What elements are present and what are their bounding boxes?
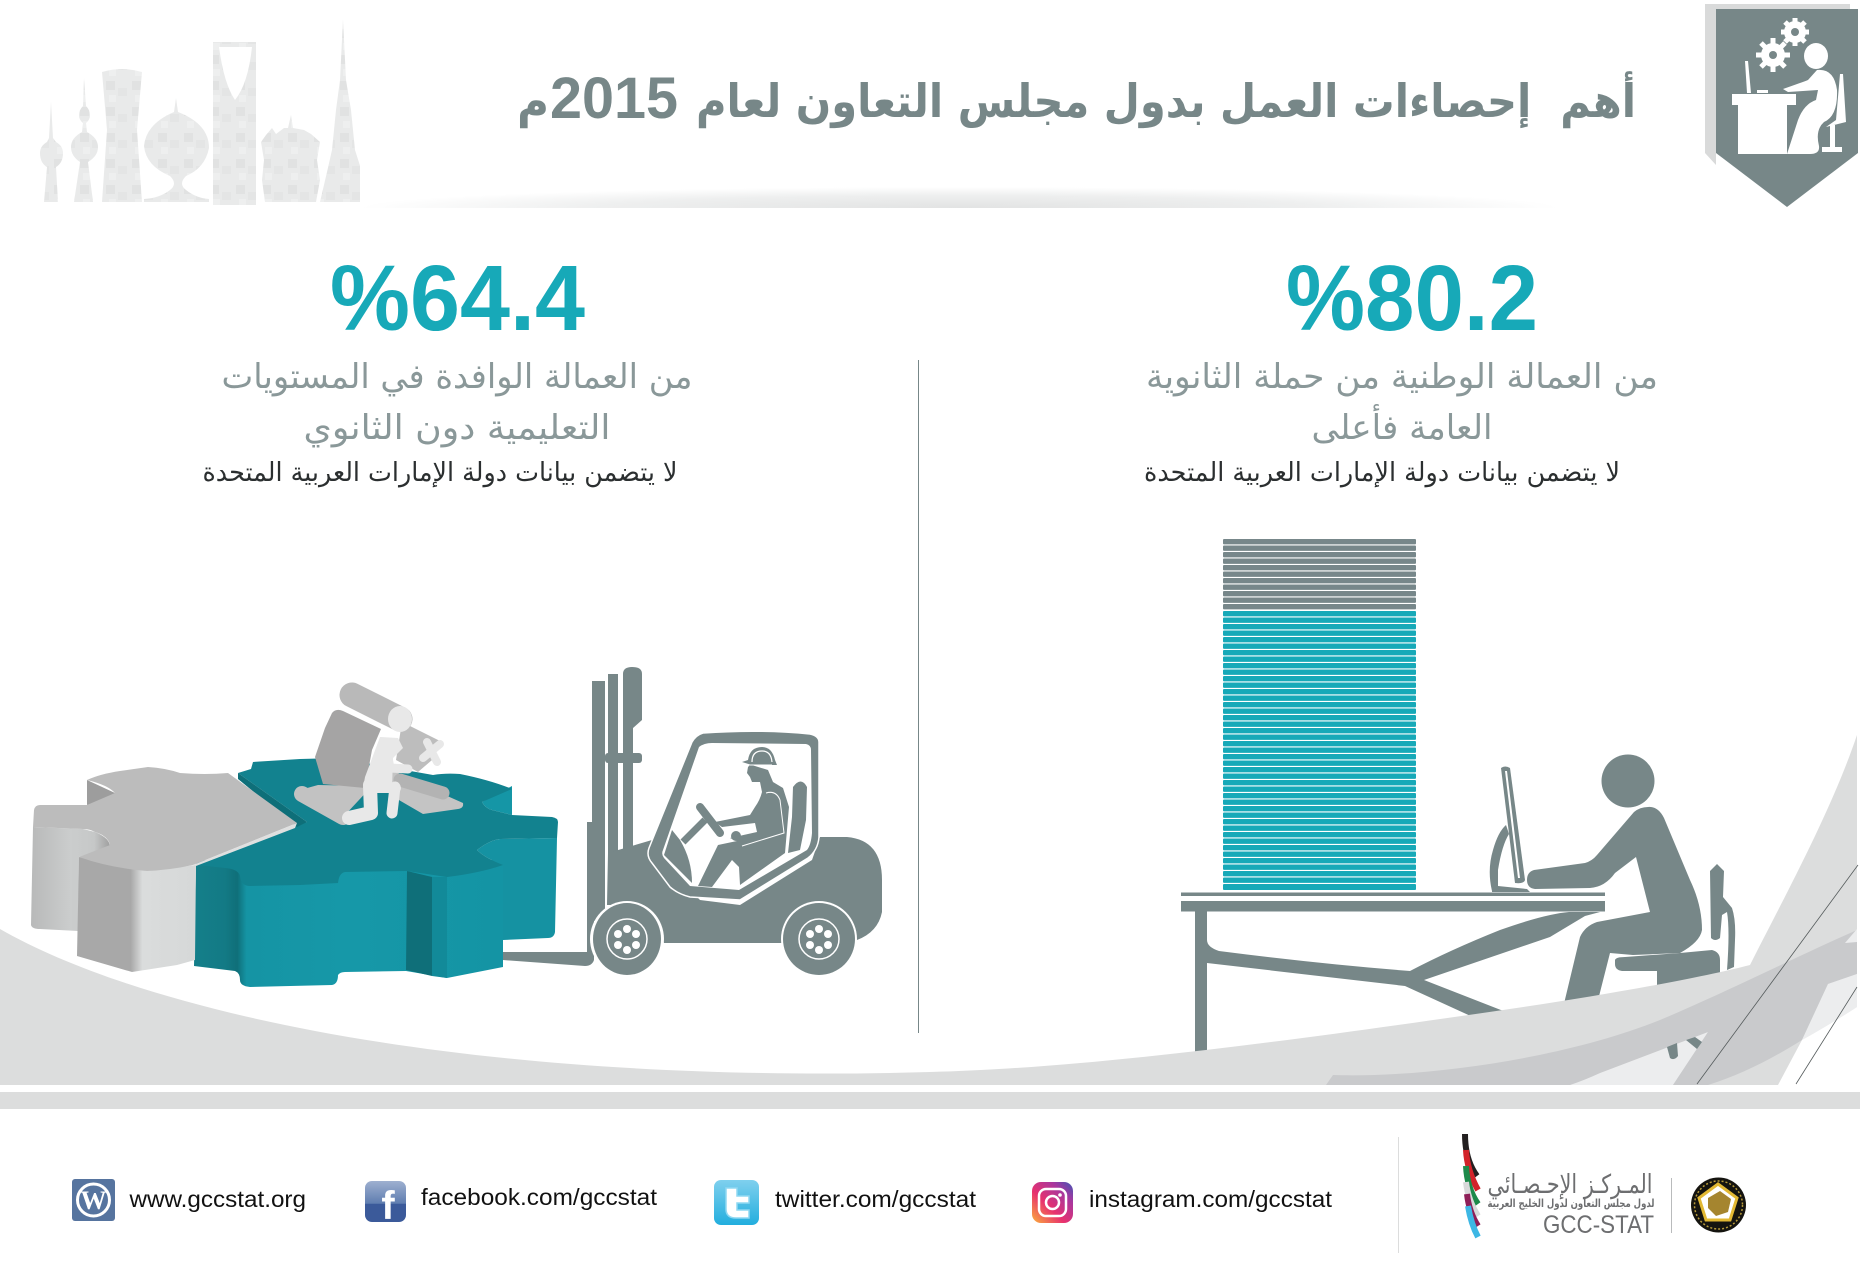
description lines: [222, 357, 692, 448]
panel: expatriate workforce statistic: [202, 246, 692, 488]
seat: [788, 782, 807, 853]
footer: instagram link: instagram.com/gccstat: [1089, 1186, 1333, 1212]
grey layers: 11: [1223, 539, 1416, 609]
forklift with driver: [503, 667, 882, 977]
pedals and steering: [664, 807, 720, 883]
footer: wordpress link: www.gccstat.org: [128, 1186, 306, 1212]
logo text: GCC-STAT: [1543, 1211, 1654, 1239]
footer divider: [1398, 1137, 1399, 1253]
rear wheel: [781, 901, 857, 977]
icon: instagram: [1032, 1182, 1073, 1223]
ribbon: [1465, 1134, 1478, 1237]
teal layers: 43: [1223, 611, 1416, 890]
footer: wordpress link: [72, 1179, 306, 1221]
description lines: من العمالة الوافدة في المستويات: [222, 357, 692, 397]
footer: twitter link: [714, 1180, 977, 1225]
GCC-STAT logo: [1465, 1134, 1746, 1239]
icon: pennant with worker and gears: [1705, 4, 1858, 207]
header shadow band: [360, 166, 1560, 208]
logo text: [1488, 1170, 1654, 1239]
note: لا يتضمن بيانات دولة الإمارات العربية المتحدة: [202, 458, 678, 488]
stat: 64.4 percent: %64.4: [330, 246, 585, 350]
gear illustration: grey cog: [31, 767, 297, 972]
footer: facebook link: [365, 1181, 658, 1228]
footer: twitter link: twitter.com/gccstat: [775, 1186, 977, 1212]
monitor: [1490, 766, 1530, 892]
description lines: التعليمية دون الثانوي: [304, 408, 610, 448]
logo text: لدول مجلس التعاون لدول الخليج العربية: [1488, 1197, 1654, 1210]
body: [607, 837, 882, 943]
cab frame: [648, 731, 819, 900]
title: [517, 66, 1636, 131]
driver: [698, 747, 789, 887]
footer: facebook link: facebook.com/gccstat: [421, 1184, 658, 1210]
divider: [918, 360, 919, 1033]
front wheel: [590, 901, 664, 977]
person working at desk: [1181, 754, 1735, 1060]
worker carrying pipes and rails: [300, 695, 463, 818]
cab window: [662, 743, 812, 890]
title: أهم إحصاءات العمل بدول مجلس التعاون لعام: [696, 71, 1636, 129]
GCC emblem: [1691, 1178, 1746, 1232]
body: [1527, 807, 1702, 1012]
chair feet: [1667, 1037, 1702, 1059]
title: م: [517, 74, 549, 128]
skyline of Gulf towers: [40, 19, 367, 205]
icon: facebook: f: [381, 1184, 395, 1228]
chair: [1615, 864, 1735, 990]
description lines: العامة فأعلى: [1312, 404, 1492, 448]
note: لا يتضمن بيانات دولة الإمارات العربية المتحدة: [1144, 458, 1620, 488]
icon: wordpress: [72, 1179, 115, 1221]
description lines: [1146, 357, 1658, 448]
description lines: من العمالة الوطنية من حملة الثانوية: [1146, 357, 1658, 397]
logo text: المـركـز الإحـصـائي: [1488, 1170, 1652, 1200]
mast: [592, 667, 642, 921]
stacked bar of 54 layers: [1223, 539, 1416, 890]
fork: [503, 822, 594, 966]
bottom swoosh background: [0, 735, 1860, 1109]
icon: wordpress: W: [80, 1186, 106, 1215]
stat: 80.2 percent: %80.2: [1286, 246, 1538, 350]
title: 2015: [550, 66, 678, 131]
icon: twitter: [714, 1180, 759, 1225]
gear illustration: teal cog: [194, 758, 558, 987]
footer: instagram link: [1032, 1182, 1333, 1223]
icon: facebook: [365, 1181, 406, 1228]
desk: [1181, 892, 1605, 1060]
panel: national workforce statistic: [1144, 246, 1658, 488]
head: [1602, 754, 1654, 808]
